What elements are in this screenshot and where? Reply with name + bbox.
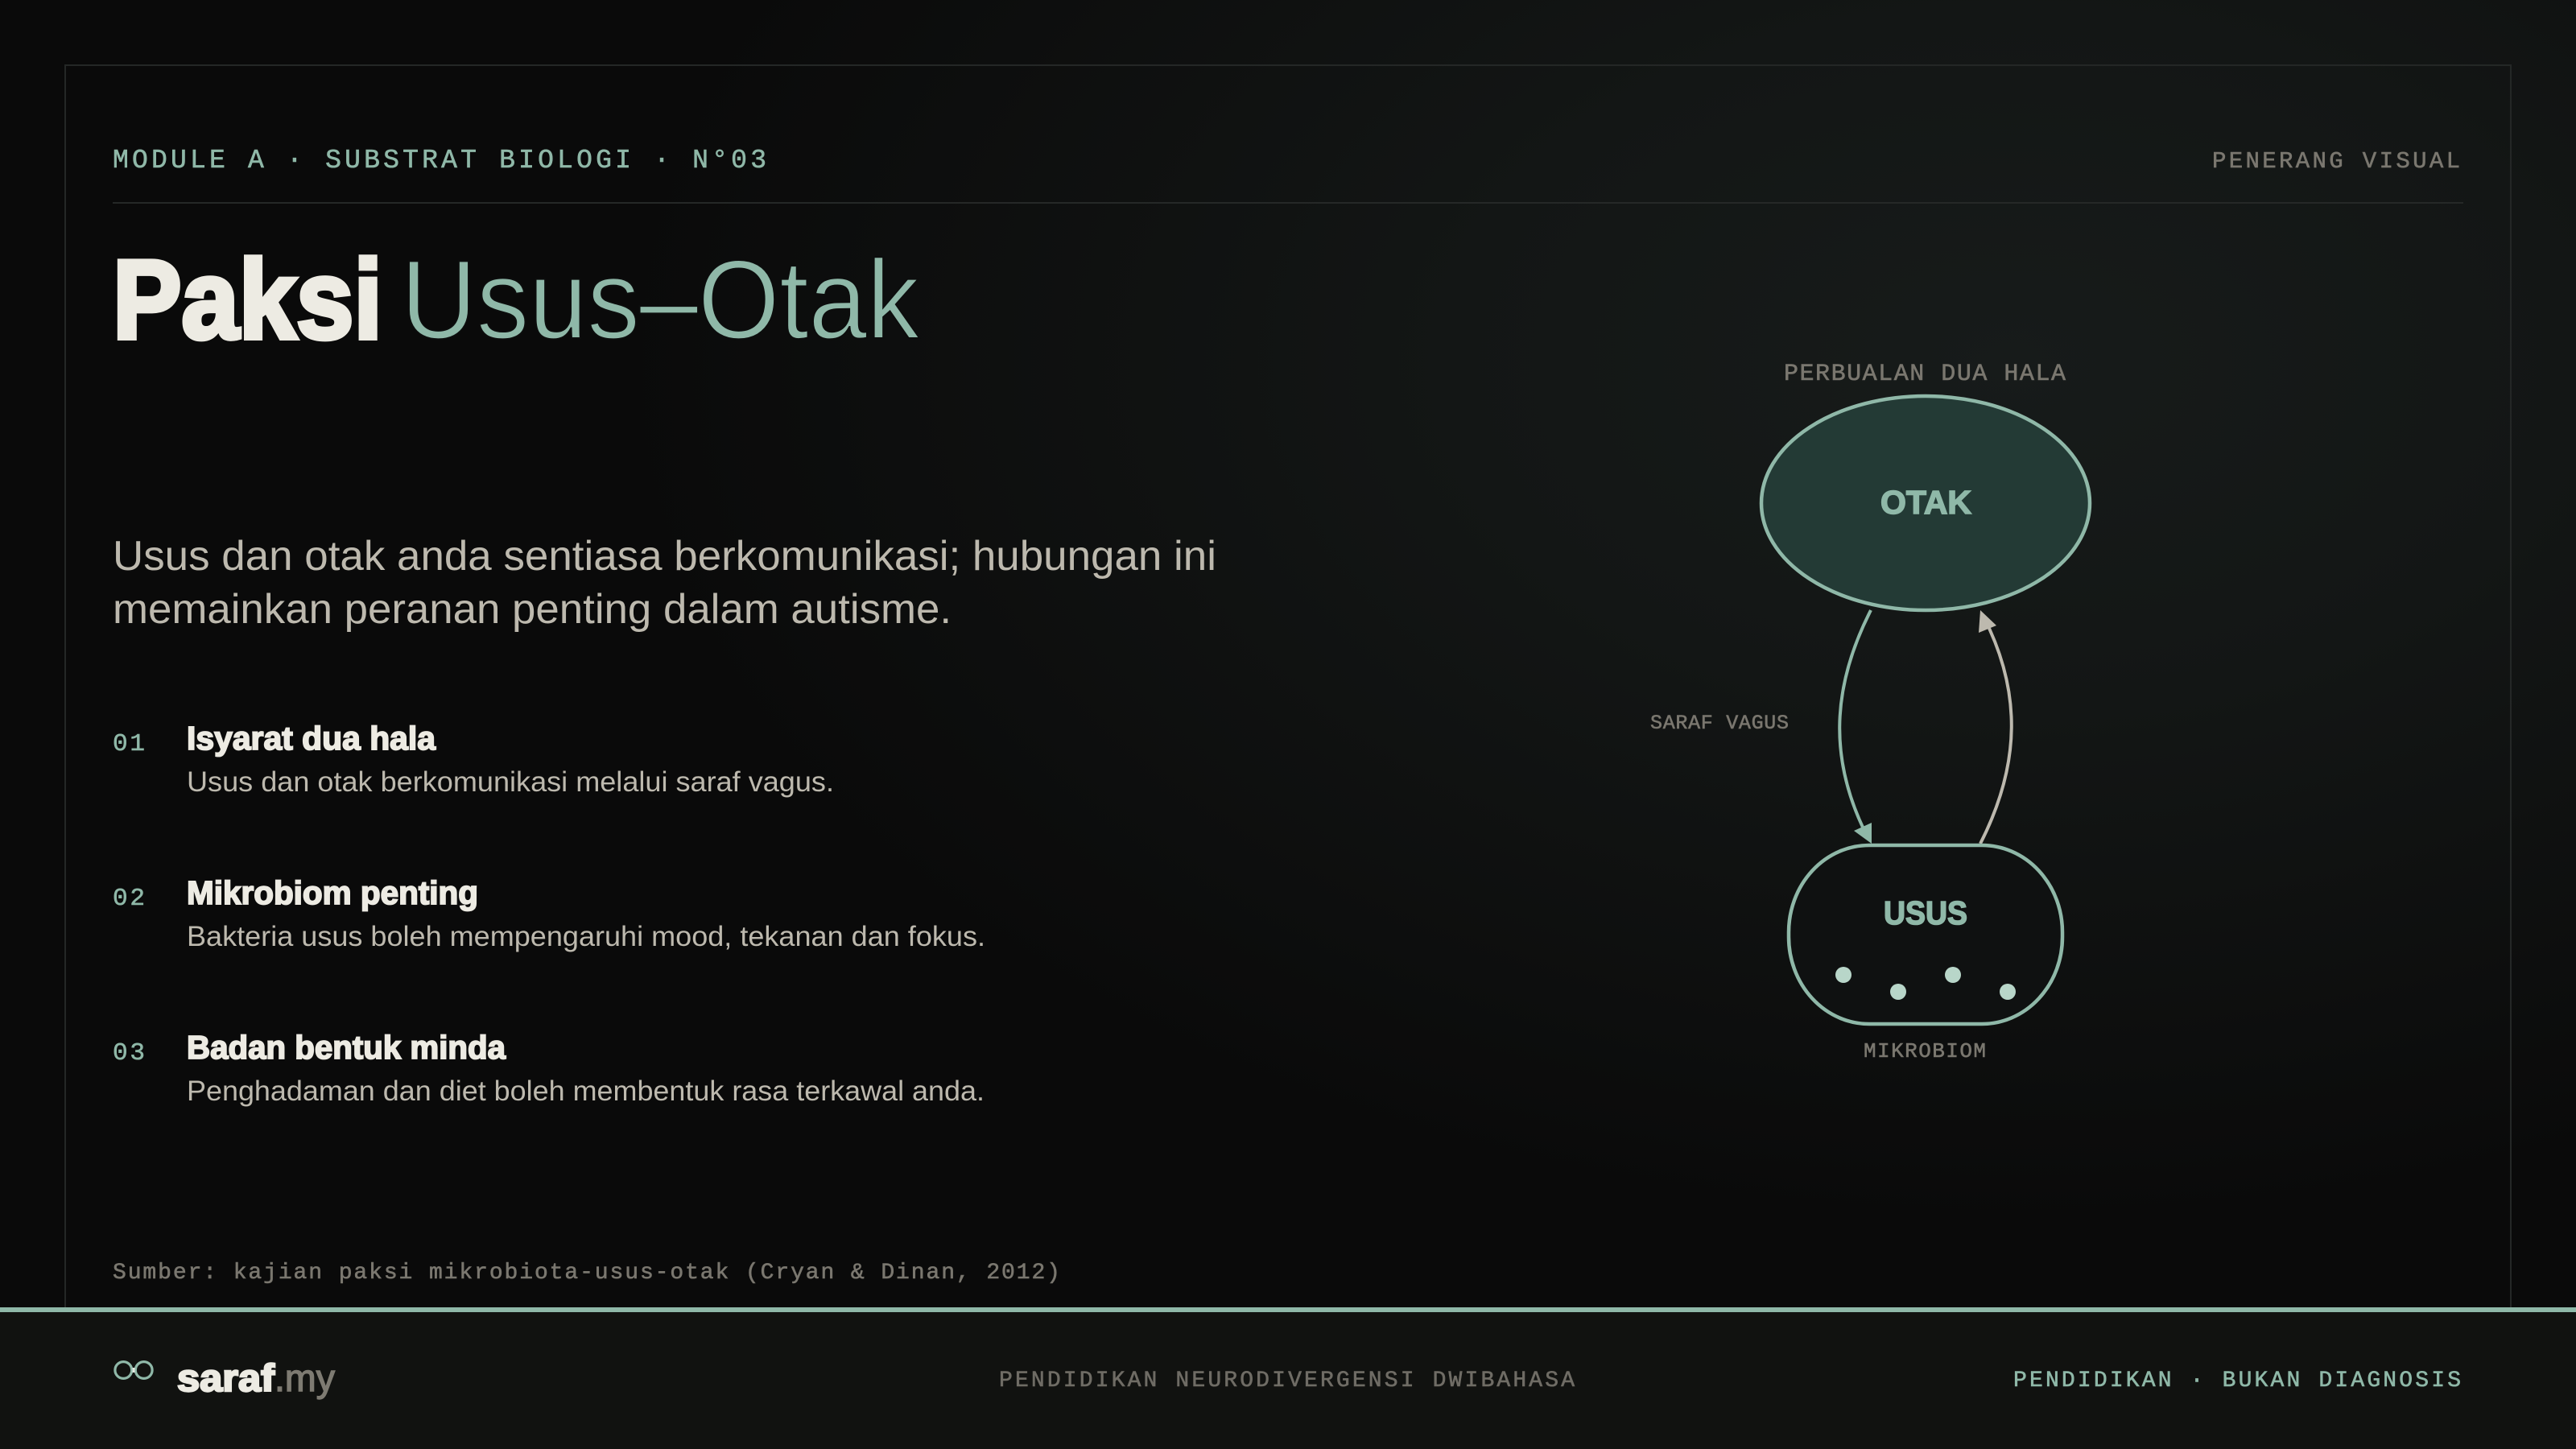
item 03 <box>113 1029 985 1107</box>
arrow: gut to brain <box>1979 610 2012 844</box>
brain node: OTAK <box>1880 484 1971 521</box>
microbiome dots <box>1835 967 2016 1000</box>
gut-brain diagram <box>1650 361 2090 1063</box>
footer <box>0 1307 2576 1449</box>
item 01: 01 <box>113 730 145 758</box>
item 01: Isyarat dua hala <box>187 720 436 757</box>
brand wordmark <box>177 1356 335 1399</box>
header <box>113 146 2463 204</box>
item 03: Badan bentuk minda <box>187 1029 506 1066</box>
footer right note: PENDIDIKAN · BUKAN DIAGNOSIS <box>2013 1368 2461 1393</box>
diagram caption: PERBUALAN DUA HALA <box>1784 361 2066 388</box>
arrow: brain to gut <box>1839 610 1872 844</box>
eyebrow: module label: MODULE A · SUBSTRAT BIOLOGI · N°03 <box>113 146 766 175</box>
gut node <box>1789 845 2062 1024</box>
lead paragraph: Usus dan otak anda sentiasa berkomunikasi; hubungan ini <box>113 533 1216 580</box>
item 03: Penghadaman dan diet boleh membentuk rasa terkawal anda. <box>187 1075 985 1107</box>
label: microbiome: MIKROBIOM <box>1864 1039 1986 1063</box>
brand wordmark: .my <box>275 1356 335 1399</box>
title <box>113 237 919 362</box>
label: vagus nerve: SARAF VAGUS <box>1650 712 1789 735</box>
brand wordmark: saraf <box>177 1356 275 1399</box>
item 01 <box>113 720 834 798</box>
title: Paksi <box>113 237 382 362</box>
title: Usus–Otak <box>401 237 919 362</box>
eyebrow: right label: PENERANG VISUAL <box>2212 148 2460 175</box>
item 01: Usus dan otak berkomunikasi melalui saraf vagus. <box>187 766 834 798</box>
brain node <box>1761 396 2090 610</box>
item 03: 03 <box>113 1039 145 1067</box>
item 02 <box>113 874 985 952</box>
lead paragraph <box>113 533 1216 633</box>
icon: infinity logo <box>115 1362 152 1378</box>
item 02: Bakteria usus boleh mempengaruhi mood, tekanan dan fokus. <box>187 921 985 952</box>
gut node: USUS <box>1884 894 1967 931</box>
source note: Sumber: kajian paksi mikrobiota-usus-otak (Cryan & Dinan, 2012) <box>113 1261 1060 1286</box>
item 02: Mikrobiom penting <box>187 874 478 911</box>
lead paragraph: memainkan peranan penting dalam autisme. <box>113 586 952 633</box>
list of three points <box>113 720 985 1107</box>
footer centre tagline: PENDIDIKAN NEURODIVERGENSI DWIBAHASA <box>999 1368 1575 1393</box>
item 02: 02 <box>113 885 145 913</box>
